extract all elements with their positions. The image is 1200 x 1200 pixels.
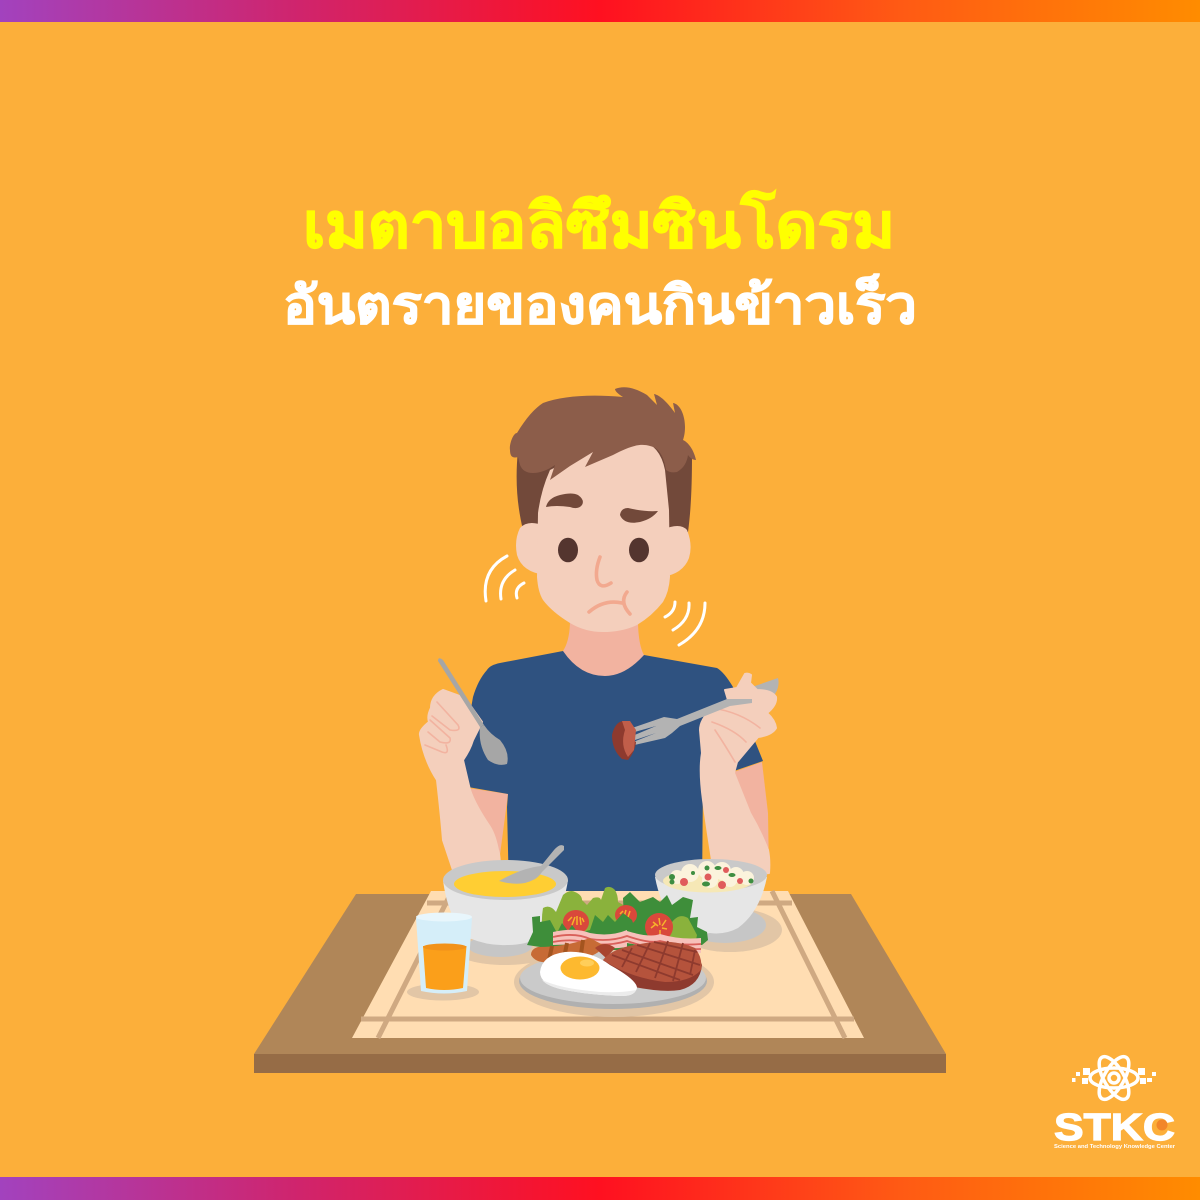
soup bowl [443, 845, 568, 965]
face [537, 440, 670, 632]
chewing motion lines [485, 556, 705, 645]
logo pixel dots [1072, 1068, 1156, 1084]
salad back leaves [542, 887, 708, 945]
glass of juice [407, 912, 479, 1000]
mouth [589, 592, 630, 614]
logo caption: Science and Technology Knowledge Center [1054, 1144, 1176, 1150]
rice grains [670, 861, 754, 888]
bacon [553, 930, 701, 953]
right forearm and hand [700, 674, 776, 880]
placemat [352, 891, 864, 1038]
soup spoon [499, 845, 564, 884]
illustration: man eating quickly [420, 387, 779, 892]
logo: STKC [1054, 1052, 1176, 1150]
head [510, 387, 696, 632]
bottom gradient bar [0, 1177, 1200, 1200]
t-shirt [462, 651, 763, 892]
back hair [517, 440, 692, 532]
neck [563, 620, 644, 690]
logo atom icon [1090, 1052, 1138, 1104]
right upper arm [720, 762, 769, 873]
sausage [531, 938, 615, 962]
logo dot [1156, 1120, 1168, 1130]
plate of food [514, 887, 714, 1017]
finger lines [425, 702, 760, 762]
table [254, 894, 946, 1073]
left forearm and hand [420, 690, 500, 870]
spoon [438, 658, 508, 765]
fork with meat [612, 699, 752, 760]
fried egg [540, 952, 637, 996]
nose [596, 557, 611, 586]
subtitle: อันตรายของคนกินข้าวเร็ว [283, 274, 917, 335]
eyebrows [546, 494, 658, 523]
left upper arm [468, 788, 508, 870]
front hair [510, 387, 696, 480]
tomatoes [563, 905, 673, 941]
eyes [558, 538, 578, 562]
steak [603, 941, 702, 991]
salad front lettuce [527, 913, 645, 950]
logo wordmark: STKC [1054, 1107, 1175, 1149]
title: เมตาบอลิซึมซินโดรม [303, 189, 895, 261]
ears [516, 523, 691, 577]
fork handle tip [752, 678, 779, 702]
rice bowl [655, 859, 782, 952]
top gradient bar [0, 0, 1200, 22]
